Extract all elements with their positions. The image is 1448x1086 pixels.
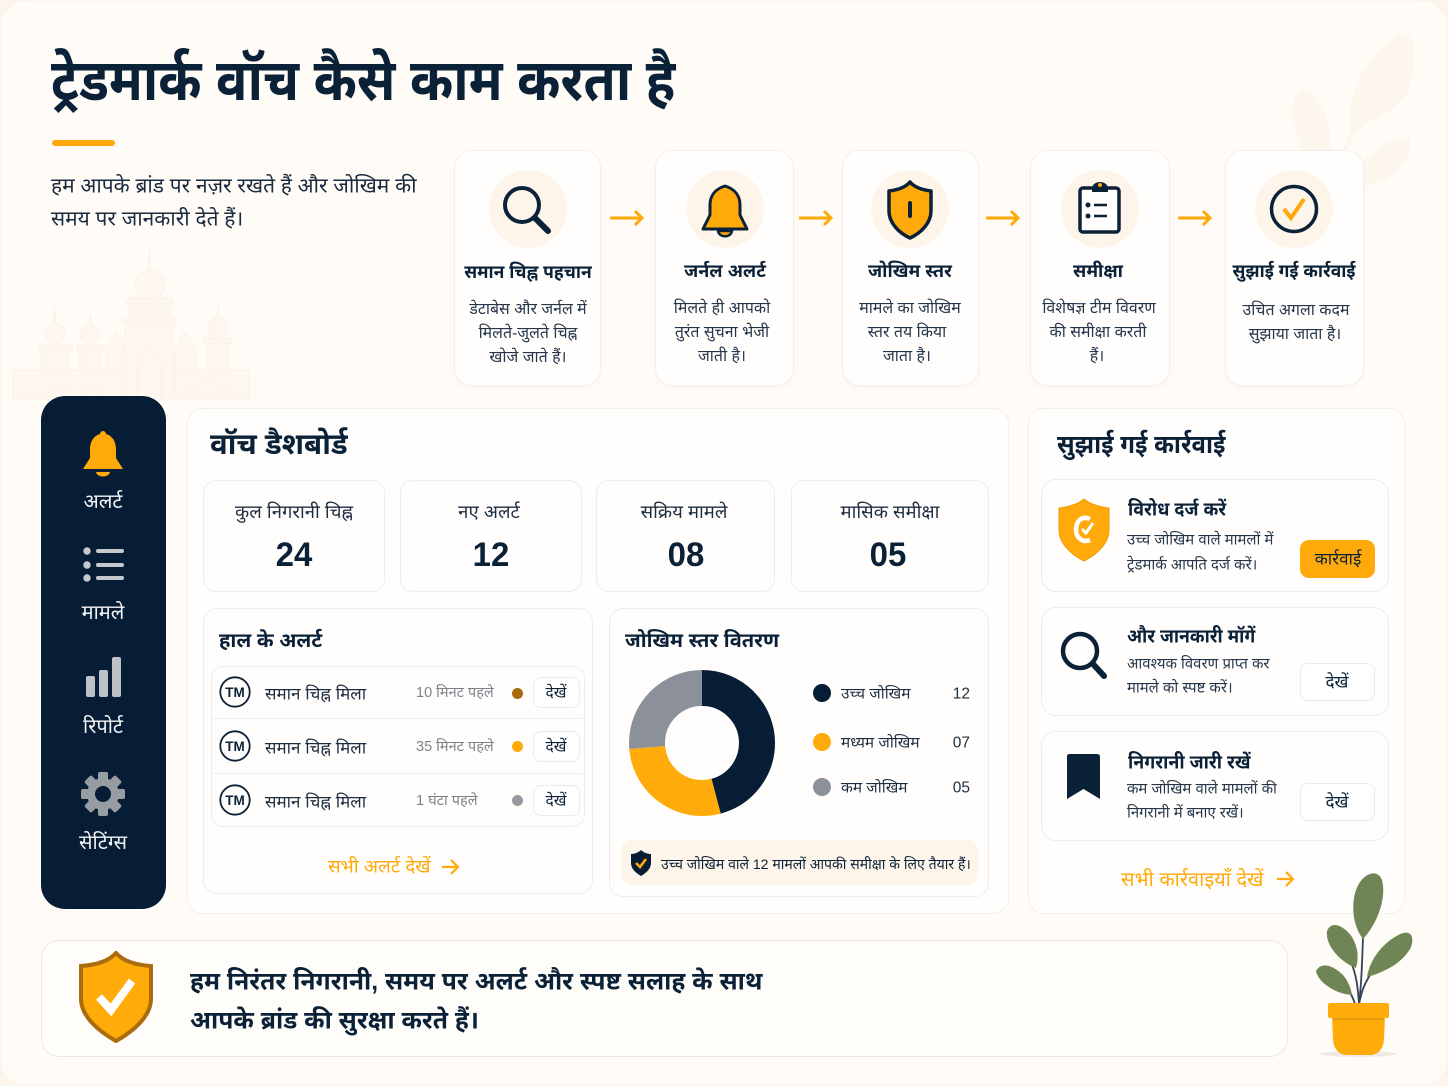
icon: small shield — [631, 850, 651, 876]
action: file opposition — [1041, 479, 1389, 592]
action description: मामले को स्पष्ट करें। — [1127, 681, 1233, 697]
see all alerts link: सभी अलर्ट देखें — [328, 856, 431, 877]
step description — [1242, 300, 1350, 344]
arrow 3 — [986, 210, 1020, 226]
action description: निगरानी में बनाए रखें। — [1127, 806, 1244, 822]
review note: उच्च जोखिम वाले 12 मामलों आपकी समीक्षा के लिए तैयार हैं। — [661, 856, 971, 872]
step description: डेटाबेस और जर्नल में — [469, 301, 587, 318]
title underline — [52, 140, 115, 146]
alert row 2: 35 मिनट पहले — [416, 739, 494, 755]
action description — [1127, 530, 1274, 574]
intro text: हम आपके ब्रांड पर नज़र रखते हैं और जोखिम की — [51, 175, 417, 198]
action description: उच्च जोखिम वाले मामलों में — [1127, 533, 1273, 549]
stat card: total marks: कुल निगरानी चिह्न — [235, 501, 353, 522]
panel: watch dashboard — [187, 408, 1009, 914]
alert row 1 — [212, 667, 583, 719]
icon: alert bell — [83, 431, 123, 476]
action: continue monitoring — [1041, 731, 1389, 841]
icon: magnifier — [489, 170, 567, 248]
arrow 2 — [799, 210, 833, 226]
action description — [1127, 655, 1270, 697]
dashboard heading: वॉच डैशबोर्ड — [210, 428, 348, 461]
step description: तुरंत सुचना भेजी — [675, 324, 769, 341]
stat card: active cases — [596, 480, 775, 592]
action button: देखें — [1326, 672, 1348, 692]
arrow 1 — [610, 210, 644, 226]
panel: suggested actions — [1028, 408, 1405, 914]
icon: bookmark — [1067, 754, 1100, 799]
alert row 2: समान चिह्न मिला — [265, 738, 366, 758]
panel heading: सुझाई गई कार्रवाई — [1057, 429, 1225, 459]
icon: shield — [871, 170, 949, 248]
legend: 07 — [953, 734, 970, 751]
step card: review — [1030, 150, 1170, 386]
legend — [813, 684, 970, 796]
decorative leaves top right — [1292, 32, 1414, 186]
icon: bar chart — [86, 657, 121, 697]
step title: सुझाई गई कार्रवाई — [1233, 261, 1355, 281]
TM badge: TM — [225, 739, 245, 754]
alert row 3: समान चिह्न मिला — [265, 792, 366, 812]
action description: ट्रेडमार्क आपति दर्ज करें। — [1127, 558, 1257, 574]
step card: suggested action — [1225, 150, 1364, 386]
step description: खोजे जाते हैं। — [489, 349, 567, 366]
step description: मिलते-जुलते चिह्न — [479, 325, 577, 342]
TM badge: TM — [225, 793, 245, 808]
legend: 12 — [953, 685, 970, 702]
icon: gear — [81, 772, 125, 816]
step card: journal alert — [655, 150, 794, 386]
action button — [1300, 663, 1375, 701]
legend: कम जोखिम — [841, 779, 908, 796]
step description: स्तर तय किया — [868, 324, 946, 341]
action button — [1300, 783, 1375, 821]
step description — [469, 300, 587, 366]
action button: देखें — [1326, 792, 1348, 812]
label: अलर्ट — [84, 491, 122, 513]
step description: जाता है। — [883, 348, 931, 365]
decorative palace watermark — [12, 250, 250, 400]
view button — [533, 785, 580, 816]
icon: list — [83, 547, 124, 582]
panel: risk distribution — [609, 608, 989, 897]
action button — [1300, 540, 1375, 578]
legend: उच्च जोखिम — [841, 685, 910, 702]
step description: उचित अगला कदम — [1243, 302, 1349, 319]
TM badge — [219, 784, 251, 816]
donut chart — [629, 670, 775, 816]
view button — [533, 677, 580, 708]
stat card: monthly review — [791, 480, 989, 592]
stat card: active cases: 08 — [668, 536, 704, 574]
see all actions link: सभी कार्रवाइयाँ देखें — [1121, 869, 1263, 891]
sidebar — [41, 396, 166, 909]
action title: विरोध दर्ज करें — [1128, 500, 1226, 520]
view button: देखें — [546, 792, 566, 809]
legend: 05 — [953, 779, 970, 796]
stat card: monthly review: 05 — [870, 536, 906, 574]
stat card: monthly review: मासिक समीक्षा — [841, 501, 939, 522]
step description: हैं। — [1090, 348, 1104, 365]
stat card: new alerts: नए अलर्ट — [458, 501, 520, 522]
stat card: active cases: सक्रिय मामले — [641, 501, 727, 522]
step title: समान चिह्न पहचान — [464, 262, 592, 282]
stat card: total marks: 24 — [276, 536, 312, 574]
label: सेटिंग्स — [79, 832, 127, 854]
footer banner — [41, 940, 1288, 1057]
legend: मध्यम जोखिम — [841, 734, 920, 751]
step description — [1042, 298, 1156, 365]
action title: और जानकारी मॉगें — [1127, 626, 1255, 648]
icon: check shield — [79, 951, 153, 1043]
alert row 1: 10 मिनट पहले — [416, 685, 494, 701]
icon: clipboard — [1061, 170, 1139, 248]
step description — [859, 298, 961, 365]
step description: सुझाया जाता है। — [1249, 326, 1341, 343]
footer message: आपके ब्रांड की सुरक्षा करते हैं। — [190, 1006, 479, 1034]
action button: कार्रवाई — [1315, 550, 1361, 568]
stat card: new alerts: 12 — [473, 536, 509, 574]
TM badge — [219, 730, 251, 762]
panel heading: हाल के अलर्ट — [219, 630, 322, 652]
TM badge: TM — [225, 685, 245, 700]
step card: similar mark detection — [454, 150, 601, 386]
icon: magnifier — [1060, 632, 1107, 679]
icon: check circle — [1255, 170, 1333, 248]
step title: समीक्षा — [1073, 261, 1123, 281]
alert row 2 — [212, 720, 583, 774]
step description: मिलते ही आपको — [674, 300, 770, 317]
view button — [533, 731, 580, 762]
icon: bell — [686, 170, 764, 248]
step title: जोखिम स्तर — [868, 261, 952, 281]
stat card: new alerts — [400, 480, 582, 592]
alert row 3 — [219, 784, 580, 816]
TM badge — [219, 676, 251, 708]
step description: जाती है। — [698, 348, 746, 365]
action description: आवश्यक विवरण प्राप्त कर — [1127, 657, 1270, 673]
plant illustration — [1316, 873, 1412, 1057]
stat card: total marks — [203, 480, 385, 592]
view button: देखें — [546, 738, 566, 755]
arrow 4 — [1178, 210, 1212, 226]
title: ट्रेडमार्क वॉच कैसे काम करता है — [51, 48, 675, 113]
panel heading: जोखिम स्तर वितरण — [625, 630, 779, 652]
review note — [621, 840, 978, 885]
footer message — [190, 967, 763, 1036]
step description: विशेषज्ञ टीम विवरण — [1042, 300, 1156, 317]
action description — [1127, 780, 1278, 822]
icon: amber shield — [1058, 498, 1110, 562]
action description: कम जोखिम वाले मामलों की — [1127, 782, 1277, 798]
action title: निगरानी जारी रखें — [1128, 752, 1250, 774]
alert row 3: 1 घंटा पहले — [416, 793, 478, 809]
intro text — [51, 174, 417, 231]
step description: मामले का जोखिम — [859, 300, 961, 317]
step description: की समीक्षा करती — [1050, 324, 1146, 341]
view button: देखें — [546, 684, 566, 701]
step card: risk level — [842, 150, 979, 386]
step title: जर्नल अलर्ट — [684, 261, 766, 281]
alert list — [211, 666, 585, 827]
step description — [674, 298, 770, 365]
alert row 1: समान चिह्न मिला — [265, 684, 366, 704]
action: request info — [1041, 607, 1389, 716]
label: मामले — [82, 602, 124, 624]
label: रिपोर्ट — [83, 716, 123, 738]
panel: recent alerts — [203, 608, 593, 894]
footer message: हम निरंतर निगरानी, समय पर अलर्ट और स्पष्ट सलाह के साथ — [190, 968, 762, 996]
intro text: समय पर जानकारी देते हैं। — [51, 208, 243, 231]
